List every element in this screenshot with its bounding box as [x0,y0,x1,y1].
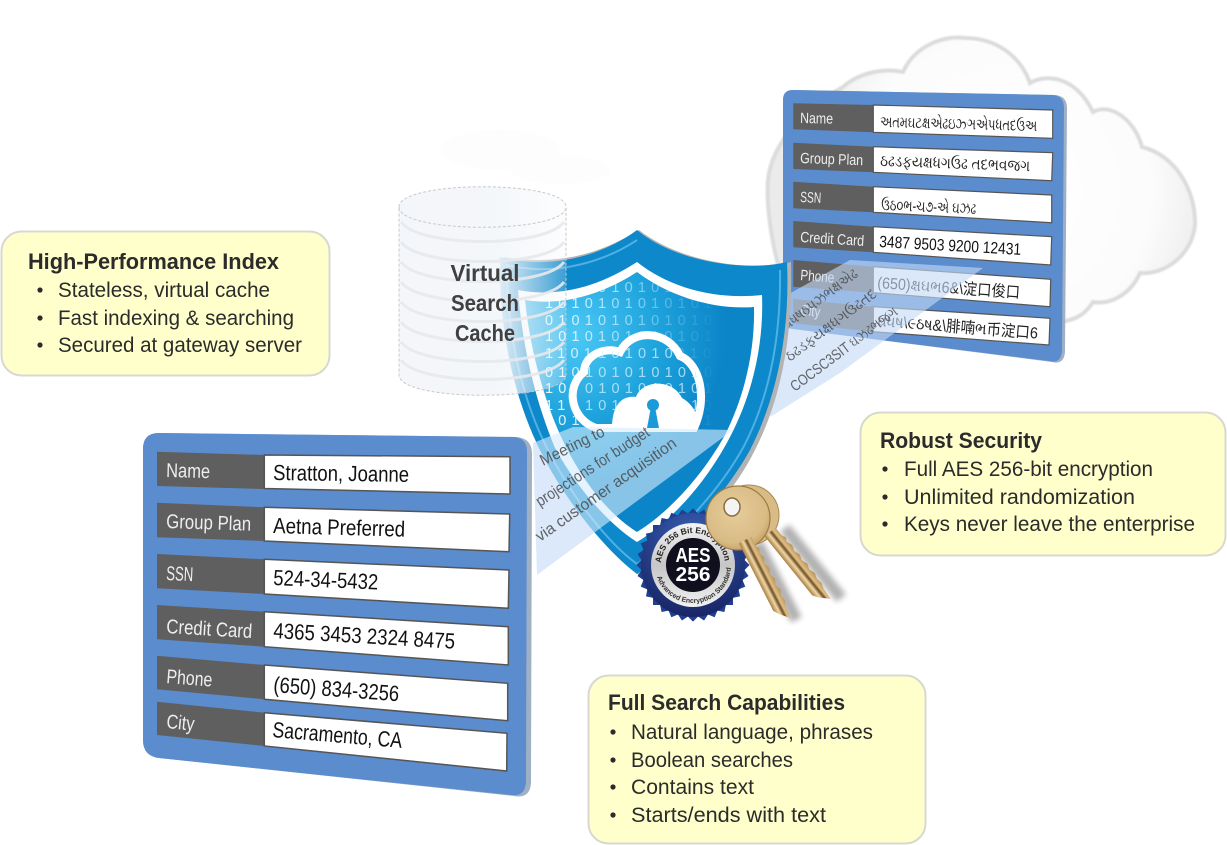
faint cloud wisps above cache [440,130,610,184]
callout: high-performance index: High-Performance Index [28,249,280,274]
binary digits: 1101010101010101 [545,398,756,414]
callout: robust security: Full AES 256-bit encryption [904,458,1153,481]
plaintext row: group plan [157,503,510,552]
encrypted row: name: Name [800,110,833,128]
callout: full search capabilities: Natural language, phrases [631,721,873,744]
shield inner panel [525,272,754,532]
callout: robust security: Unlimited randomization [904,486,1135,509]
card body [783,90,1067,363]
plaintext row: group plan: Aetna Preferred [273,513,406,542]
encrypted row: name [793,103,1053,138]
right beam garbled text: ઘધષઠ૫ઝભક્ષએઢ [779,265,861,333]
encrypted row: phone: Phone [800,267,835,287]
plaintext row: phone: Phone [166,666,213,692]
cloud lock emblem [573,335,718,428]
plaintext row: name: Name [166,460,210,483]
callout: full search capabilities: Boolean searches [631,749,793,772]
AES 256 seal: AES 256 Bit Encryption [656,527,729,563]
plaintext record card [143,433,532,796]
right data beam over card [770,260,983,417]
key shadow [752,524,846,623]
encrypted row: phone [793,260,1051,307]
AES 256 seal: Advanced Encryption Standard [657,568,731,604]
encrypted row: group plan: Group Plan [800,150,863,169]
cloud lock emblem: 1010101010 [585,398,718,414]
encrypted row: credit card [793,221,1052,265]
plaintext row: phone: (650) 834-3256 [273,672,400,706]
callout: robust security: Keys never leave the enterprise [904,513,1195,536]
plaintext row: name [157,452,510,494]
plaintext row: credit card [157,605,508,665]
encrypted record card [783,90,1067,363]
encrypted row: city: City [800,302,822,321]
beam text: plaintext entering shield: projections for budget [533,424,653,510]
callout: full search capabilities: Full Search Capabilities [608,690,845,715]
AES 256 seal [636,508,750,622]
binary digits [546,282,712,425]
left data beam, under shield [533,427,733,575]
front key [706,486,794,623]
callout: robust security: Robust Security [880,428,1043,453]
binary digits: 1010101010101010 [545,296,757,312]
plaintext row: city: City [166,711,196,736]
cache label: Virtual [450,260,520,286]
encrypted row: phone: (650)ક્ષઘભ6&\淀口俊口 [877,274,1021,302]
gold keys [706,485,846,623]
AES 256 seal: 256 [676,564,710,586]
cloud behind encrypted card [768,37,1195,322]
plaintext row: credit card: 4365 3453 2324 8475 [273,618,456,654]
binary digits: 0101010101010101 [545,365,757,381]
AES 256 seal: AES [676,545,710,567]
plaintext row: phone [157,656,508,721]
cache label [450,260,520,346]
virtual search cache cylinder [399,187,566,395]
plaintext row: ssn: SSN [166,563,194,586]
plaintext row: ssn: 524-34-5432 [273,565,379,595]
binary digits: 1010101010101010 [545,413,757,429]
encrypted row: credit card: Credit Card [800,229,865,250]
beam text: plaintext entering shield: Meeting to [537,424,608,470]
cache label: Search [451,290,519,316]
shield grey edge [504,230,791,576]
back key [719,485,834,606]
callout: full search capabilities: Contains text [631,776,754,799]
shield white band [518,262,762,542]
encrypted row: ssn: ઉઠ૦ભ-ચ૭-એ ઘઝઢ [881,195,977,218]
encrypted row: credit card: 3487 9503 9200 12431 [879,233,1022,259]
callout: high-performance index: Stateless, virtual cache [58,279,270,302]
right beam garbled text [779,265,901,395]
right beam garbled text: COCSC3SIT ઘઝઢભજગ [787,303,901,395]
cloud lock emblem: 0101010101 [585,381,718,397]
callout: full search capabilities: Starts/ends with text [631,804,826,827]
callout: robust security [860,412,1226,556]
binary digits: 0101010101010101 [545,313,757,329]
shield lighter rim [507,240,780,564]
binary digits: 1010101010101010 [545,329,757,345]
beam text: plaintext entering shield: via customer acquisition [533,435,680,545]
encrypted row: ssn [793,182,1052,223]
cloud lock emblem: 0101010101 [585,346,718,362]
binary digits: 1010101010101010 [545,381,757,397]
callout: high-performance index: Secured at gateway server [58,334,302,357]
shield blue body [500,230,787,574]
encrypted row: city [793,299,1050,345]
left data beam over shield [536,427,733,532]
plaintext row: city [157,702,507,771]
callout: full search capabilities [588,676,926,844]
binary digits: 0101010101010101 [545,280,757,296]
right beam garbled text: ઠઢડફયક્ષધગઉઢતદ [782,285,880,365]
cloud lock emblem: 1010101010 [585,365,718,381]
encrypted row: city: ઘધષ\૯ઠષ&\腓喃ભ币淀口6 [877,312,1039,343]
callout: high-performance index: Fast indexing & searching [58,307,294,330]
plaintext row: ssn [157,554,509,608]
card body [143,433,532,796]
encrypted row: name: અતમઘટક્ષએઢઇઝ્ઞએપધતદઉઅ [880,112,1037,135]
plaintext row: group plan: Group Plan [166,511,251,536]
plaintext row: credit card: Credit Card [166,616,253,643]
binary digits: 1101010101010101 [545,346,756,362]
shield [500,230,791,576]
encrypted row: group plan: ઠઢડફયક્ષધગઉઢ તદભવજગ [880,152,1031,175]
callout: high-performance index [2,232,330,376]
plaintext row: name: Stratton, Joanne [273,460,409,487]
plaintext row: city: Sacramento, CA [272,717,403,753]
encrypted row: group plan [793,143,1053,181]
cache label: Cache [455,320,515,346]
encrypted row: ssn: SSN [800,189,822,207]
